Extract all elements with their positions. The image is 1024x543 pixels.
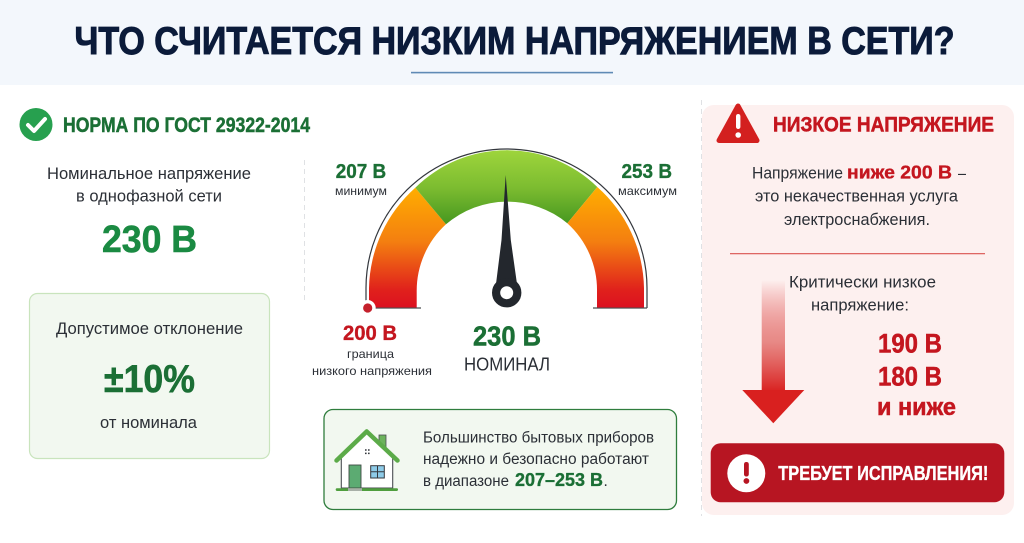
label: low limit [312,322,432,378]
critical values: 190 В [878,329,942,359]
note text [423,430,654,490]
gauge green segment [415,150,597,224]
low voltage description: электроснабжения. [784,211,930,229]
note text: в диапазоне [423,473,509,490]
nominal voltage block: 230 В [102,219,197,261]
nominal voltage block: в однофазной сети [76,188,222,206]
label: maximum [618,161,677,198]
gauge right segment [567,187,644,308]
icon: warning triangle [719,106,757,140]
low voltage description: ниже 200 В [847,162,952,182]
nominal voltage block: Номинальное напряжение [47,165,251,183]
critical label [789,273,936,315]
note text: надежно и безопасно работают [423,451,649,468]
panel: allowed deviation: от номинала [100,414,198,432]
low voltage description: Напряжение [752,164,843,182]
critical values: и ниже [877,394,956,421]
label: maximum: 253 В [622,161,672,183]
note text: Большинство бытовых приборов [423,430,654,447]
needle [496,175,517,303]
arrow: down [742,280,804,423]
icon: house [336,432,398,491]
low voltage description: это некачественная услуга [755,188,959,206]
label: low limit: граница [347,347,394,361]
label: maximum: максимум [618,184,677,198]
critical values: 180 В [878,361,942,391]
low voltage description [752,162,967,229]
panel: allowed deviation [30,294,270,458]
low voltage heading: НИЗКОЕ НАПРЯЖЕНИЕ [773,114,994,137]
label: minimum: минимум [335,184,387,198]
label: minimum: 207 В [336,161,386,183]
button: fix required [711,443,1004,502]
icon: green check [20,108,52,141]
label: nominal: НОМИНАЛ [464,354,550,375]
critical label: Критически низкое [789,273,936,291]
nominal voltage block [47,165,251,261]
label: nominal [464,321,550,375]
critical label: напряжение: [811,297,909,315]
gauge chart [312,149,677,378]
panel: allowed deviation: ±10% [104,358,195,401]
gauge left segment [369,188,446,308]
note text: 207–253 В [515,470,603,490]
critical values [877,329,956,421]
gauge outer line [366,149,647,308]
label: nominal: 230 В [473,321,541,352]
low voltage description: – [958,164,967,182]
label: minimum [335,161,387,198]
label: low limit: низкого напряжения [312,364,432,378]
note text: . [604,473,608,490]
heading text: НОРМА ПО ГОСТ 29322-2014 [63,113,310,137]
header band [0,0,1024,85]
panel: appliances note [324,410,676,510]
icon: exclamation [727,454,765,492]
section heading: norm [20,108,310,141]
panel: low voltage [702,105,1014,515]
label: low limit: 200 В [343,322,397,345]
panel: allowed deviation: Допустимое отклонение [56,320,243,338]
low limit marker [360,300,376,316]
